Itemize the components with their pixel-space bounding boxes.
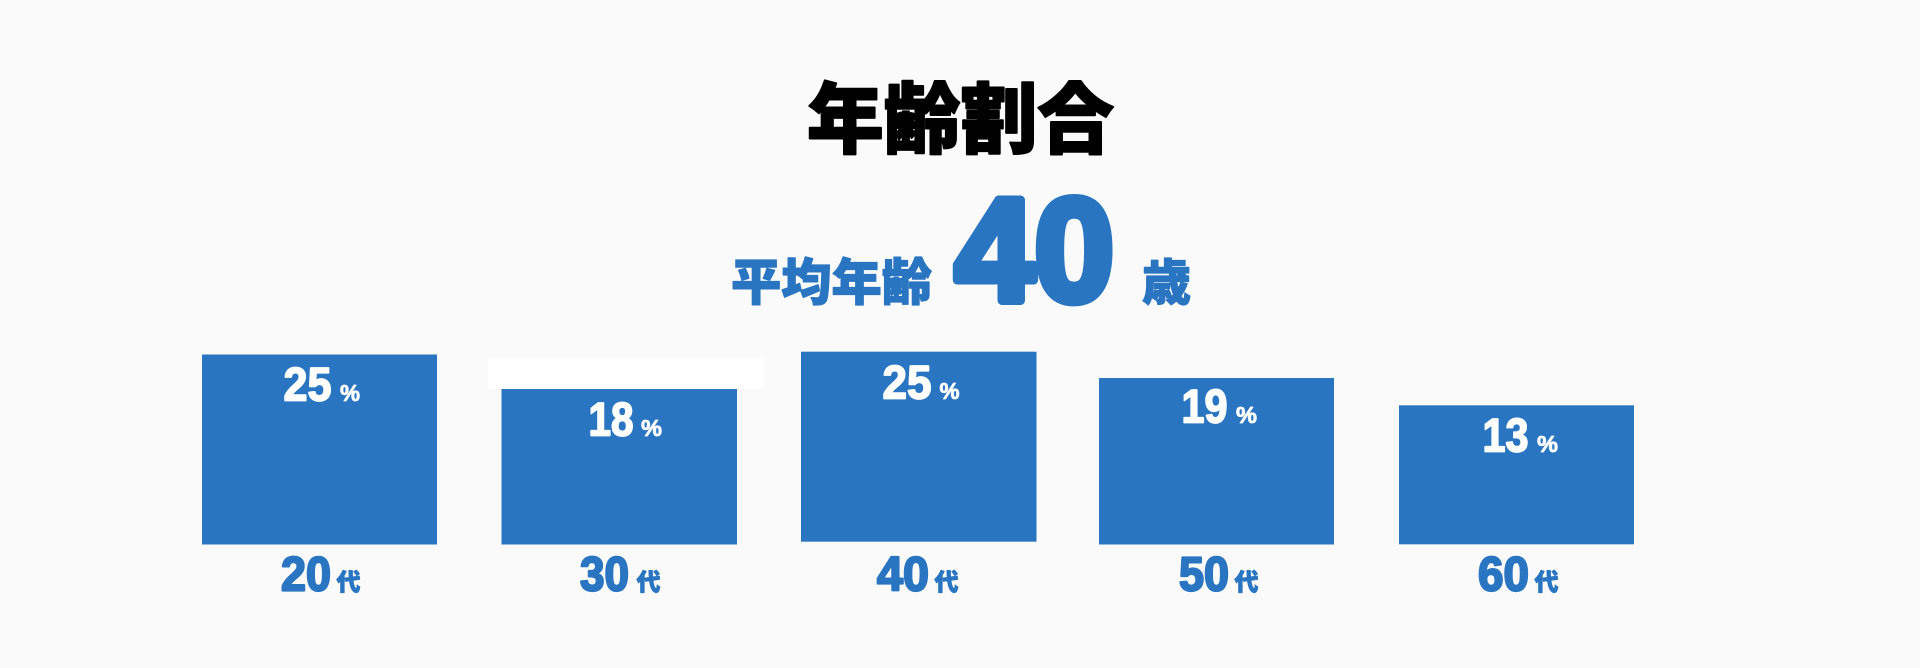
bar: 50s: 19: [1182, 380, 1228, 432]
white highlight strip above 30s bar: [488, 358, 764, 389]
axis label: 30s: 代: [636, 570, 660, 596]
bar: 60s: 13: [1482, 408, 1528, 462]
average age label: 平均年齢: [731, 255, 932, 311]
bar: 40s: 25: [882, 356, 932, 408]
bar: 30s: 18: [588, 392, 634, 446]
axis label: 30s: 30: [580, 548, 629, 602]
axis label: 60s: 代: [1534, 570, 1558, 596]
average age callout: [731, 168, 1191, 332]
bar: 60s: [1399, 405, 1634, 544]
bar: 60s: %: [1537, 431, 1558, 457]
axis label: 40s: [877, 548, 958, 602]
axis label: 50s: [1179, 548, 1258, 602]
axis label: 50s: 代: [1234, 570, 1258, 596]
axis label: 20s: 20: [281, 548, 331, 602]
axis label: 40s: 代: [934, 570, 958, 596]
axis label: 30s: [580, 548, 660, 602]
bar: 30s: [502, 389, 737, 544]
bar: 50s: [1099, 378, 1334, 544]
bar: 40s: %: [940, 378, 960, 404]
title: 年齢割合: [807, 78, 1114, 164]
bar: 20s: %: [340, 380, 360, 406]
bar: 30s: %: [641, 415, 662, 441]
bar: 40s: [801, 352, 1036, 542]
average age number: 40: [955, 168, 1114, 332]
axis label: 60s: 60: [1478, 548, 1529, 602]
bar: 20s: [202, 354, 437, 544]
bar: 50s: %: [1236, 402, 1257, 428]
axis label: 20s: 代: [336, 570, 360, 596]
axis label: 20s: [281, 548, 360, 602]
average age unit: 歳: [1142, 257, 1191, 311]
axis label: 50s: 50: [1179, 548, 1229, 602]
axis label: 60s: [1478, 548, 1558, 602]
bar: 20s: 25: [284, 358, 332, 410]
axis label: 40s: 40: [877, 548, 929, 602]
bar chart: [202, 352, 1634, 602]
